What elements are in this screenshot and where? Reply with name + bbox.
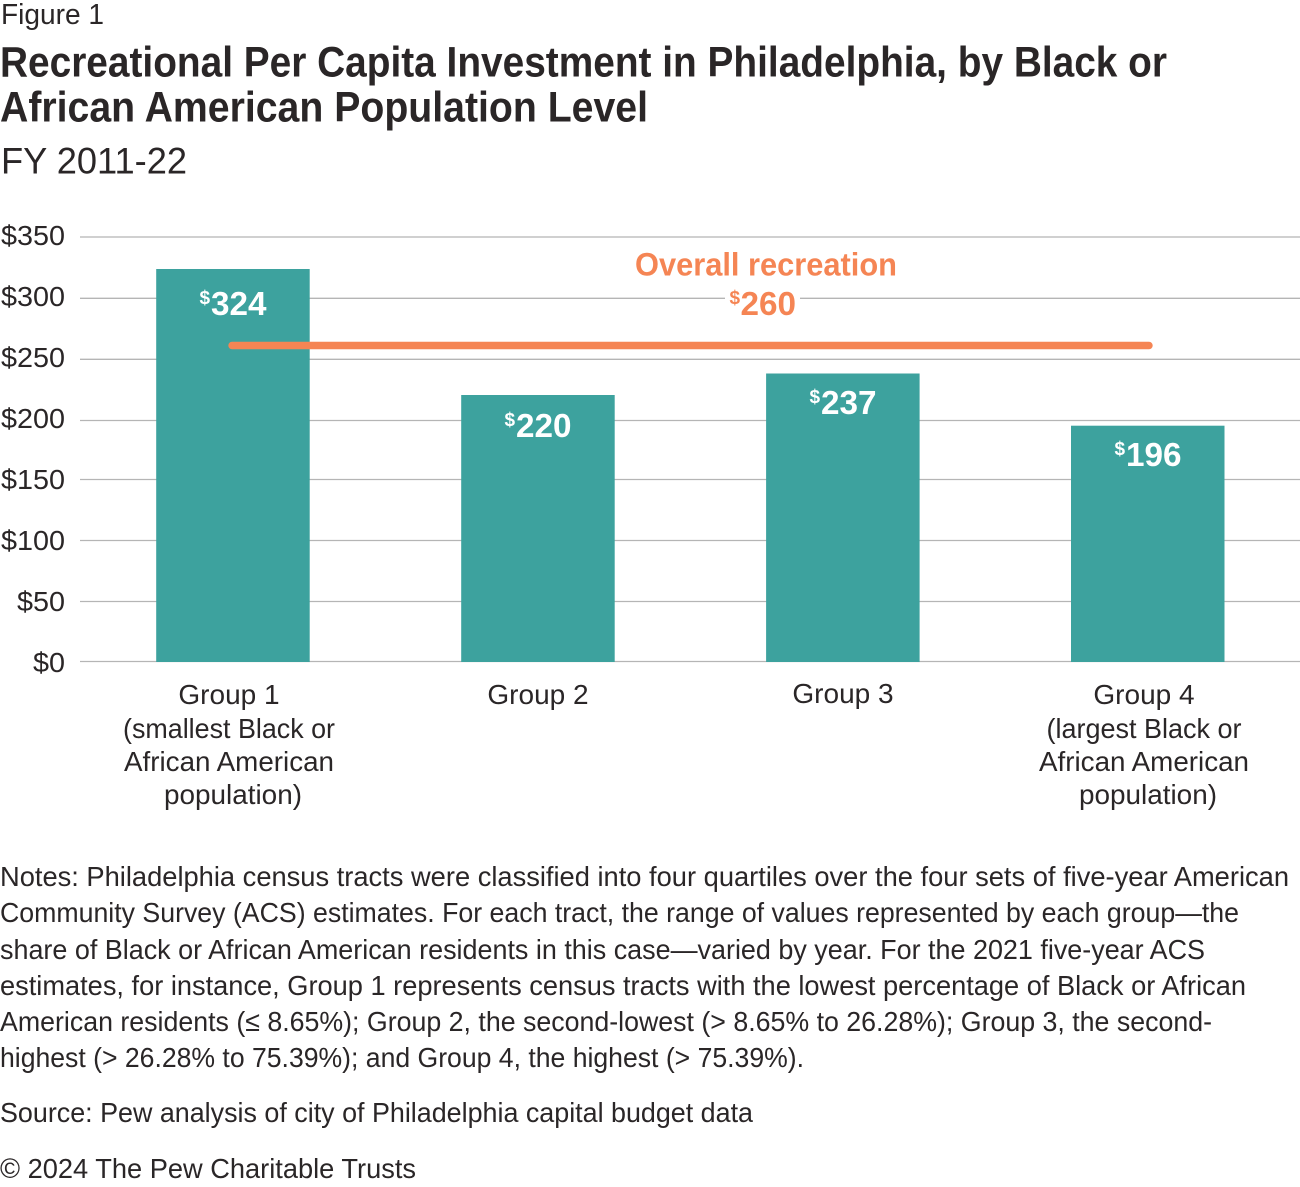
y axis labels: $350 <box>1 220 65 251</box>
overall recreation line <box>232 342 1149 349</box>
category labels: Group 3 <box>792 678 894 709</box>
bar chart <box>1 220 1300 810</box>
bar: group 1 <box>156 269 310 662</box>
value label: group 1: $ <box>200 288 210 309</box>
y axis labels: $150 <box>1 464 65 495</box>
title: Recreational Per Capita Investment in Philadelphia, by Black or <box>0 38 1167 86</box>
category labels: Group 4 <box>1093 679 1195 710</box>
value label: group 1: 324 <box>211 285 267 322</box>
notes: Community Survey (ACS) estimates. For each tract, the range of values represented by each group—the <box>0 897 1239 928</box>
y axis labels: $0 <box>33 647 65 678</box>
y axis labels: $200 <box>1 403 65 434</box>
copyright: © 2024 The Pew Charitable Trusts <box>0 1153 416 1184</box>
value label: group 2: 220 <box>516 407 572 444</box>
category labels: population) <box>1079 779 1217 810</box>
category labels <box>123 678 1249 810</box>
overall recreation label: 260 <box>740 285 796 322</box>
y axis labels: $300 <box>1 281 65 312</box>
category labels: African American <box>124 746 334 777</box>
notes: Notes: Philadelphia census tracts were classified into four quartiles over the four sets of five-year American <box>0 861 1289 892</box>
notes: share of Black or African American residents in this case—varied by year. For the 2021 five-year ACS <box>0 934 1205 965</box>
y axis labels <box>1 220 65 678</box>
overall recreation label: $ <box>730 288 740 309</box>
notes: estimates, for instance, Group 1 represents census tracts with the lowest percentage of Black or African <box>0 970 1246 1001</box>
overall recreation label <box>635 246 897 322</box>
value label: group 4: $ <box>1114 439 1126 460</box>
overall recreation label: Overall recreation <box>635 246 897 282</box>
value label: group 2: $ <box>504 410 516 431</box>
category labels: African American <box>1039 746 1249 777</box>
source: Source: Pew analysis of city of Philadelphia capital budget data <box>0 1097 753 1128</box>
notes <box>0 861 1289 1073</box>
bar: group 3 <box>766 374 920 662</box>
title <box>0 38 1167 132</box>
notes: American residents (≤ 8.65%); Group 2, the second-lowest (> 8.65% to 26.28%); Group 3, the second- <box>0 1006 1212 1037</box>
y axis labels: $100 <box>1 525 65 556</box>
y axis labels: $250 <box>1 342 65 373</box>
category labels: (smallest Black or <box>123 713 335 744</box>
value label: group 4: 196 <box>1126 436 1182 473</box>
category labels: Group 2 <box>487 679 589 710</box>
notes: highest (> 26.28% to 75.39%); and Group 4, the highest (> 75.39%). <box>0 1042 804 1073</box>
bar: group 4 <box>1071 426 1224 662</box>
y axis labels: $50 <box>17 586 65 617</box>
subtitle: FY 2011-22 <box>1 140 187 182</box>
value label: group 3: 237 <box>821 384 876 421</box>
value label: group 3: $ <box>810 387 820 408</box>
category labels: (largest Black or <box>1046 713 1242 744</box>
category labels: population) <box>164 779 302 810</box>
category labels: Group 1 <box>178 679 280 710</box>
bar: group 2 <box>461 395 615 662</box>
title: African American Population Level <box>0 84 648 132</box>
